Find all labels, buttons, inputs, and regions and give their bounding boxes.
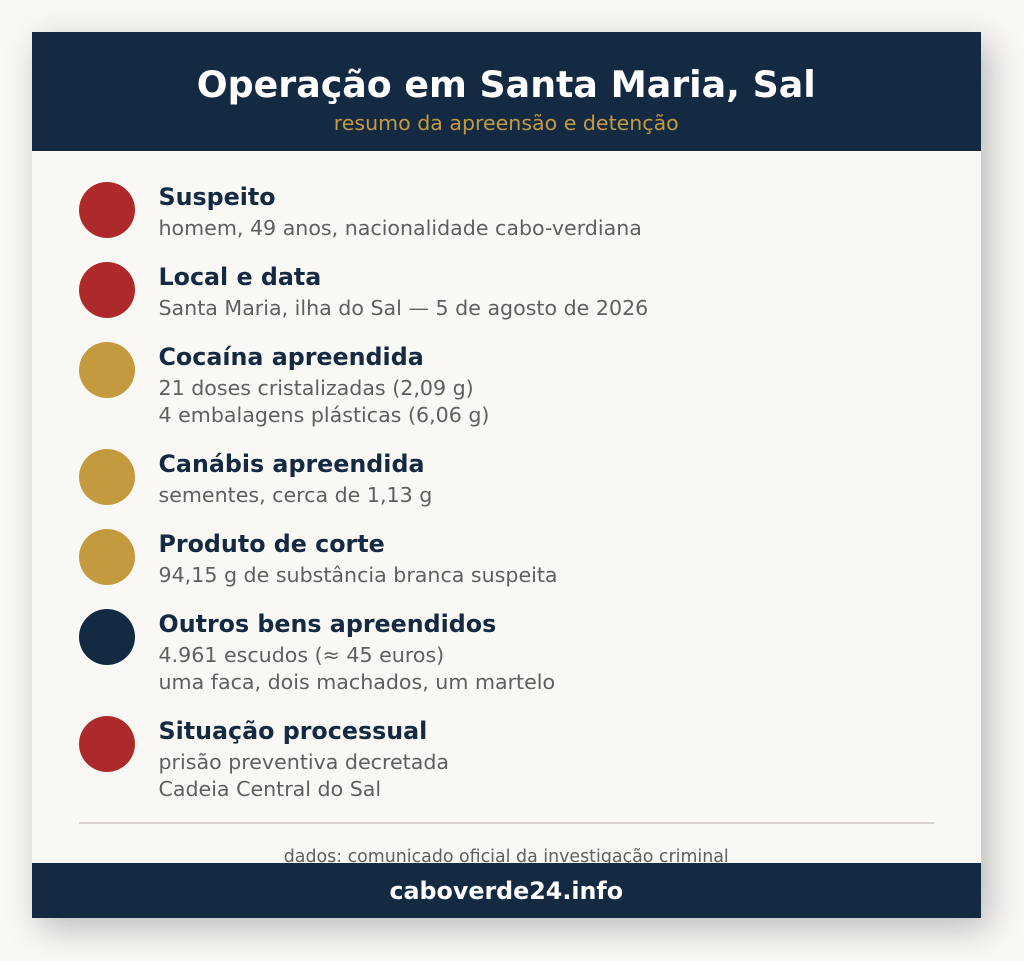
item: cocaína (79, 342, 489, 426)
footer brand: caboverde24.info (389, 877, 623, 905)
header band (32, 32, 981, 151)
description: uma faca, dois machados, um martelo (158, 670, 555, 694)
label: Cocaína apreendida (158, 342, 424, 370)
icon: gold dot (79, 449, 135, 505)
label: Local e data (158, 262, 321, 290)
label: Situação processual (158, 716, 427, 744)
icon: red dot (79, 262, 135, 318)
icon: navy dot (79, 609, 135, 665)
label: Canábis apreendida (158, 450, 424, 478)
label: Outros bens apreendidos (158, 610, 496, 638)
description: sementes, cerca de 1,13 g (158, 482, 432, 506)
description: 21 doses cristalizadas (2,09 g) (158, 376, 474, 400)
description: Santa Maria, ilha do Sal — 5 de agosto de 2026 (158, 296, 648, 320)
icon: red dot (79, 716, 135, 772)
source note: dados: comunicado oficial da investigação criminal (284, 847, 729, 867)
icon: gold dot (79, 529, 135, 585)
description (158, 642, 555, 694)
footer band (32, 863, 981, 918)
item: produto de corte (79, 529, 558, 586)
item: situação processual (79, 716, 449, 800)
item: canábis (79, 449, 432, 506)
icon: gold dot (79, 342, 135, 398)
description (158, 376, 489, 426)
item: outros bens (79, 609, 555, 694)
label: Produto de corte (158, 530, 385, 558)
description: 4 embalagens plásticas (6,06 g) (158, 402, 489, 426)
description: Cadeia Central do Sal (158, 776, 381, 800)
item: local e data (79, 262, 648, 320)
description: 94,15 g de substância branca suspeita (158, 562, 558, 586)
subtitle: resumo da apreensão e detenção (334, 111, 679, 135)
description (158, 750, 449, 800)
label: Suspeito (158, 182, 276, 210)
icon: red dot (79, 182, 135, 238)
description: prisão preventiva decretada (158, 750, 449, 774)
title: Operação em Santa Maria, Sal (197, 63, 816, 106)
description: homem, 49 anos, nacionalidade cabo-verdiana (158, 216, 642, 240)
description: 4.961 escudos (≈ 45 euros) (158, 642, 444, 666)
item: suspeito (79, 182, 642, 240)
